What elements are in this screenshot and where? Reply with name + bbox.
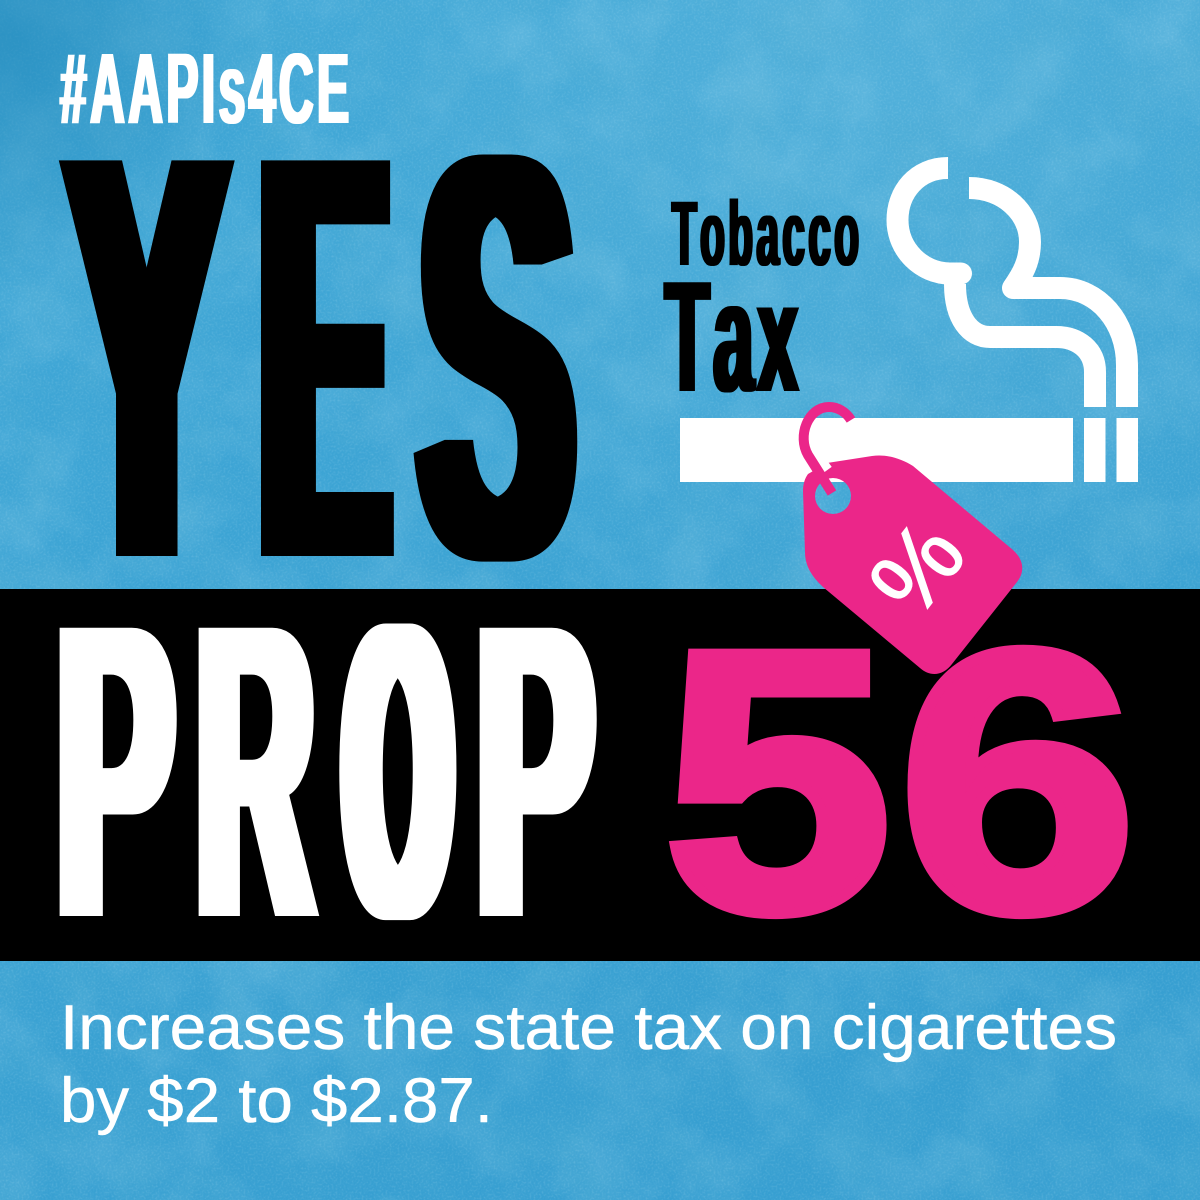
number 56: 6 [898,574,1137,990]
icon: price tag [803,407,1022,674]
percent symbol: % [849,502,986,635]
number 56: 5 [663,574,892,990]
PROP headline: P [477,538,594,1006]
description text [60,993,1117,1136]
PROP headline: P [57,538,174,1006]
tag body [803,455,1022,674]
Tobacco label: Tobacco [672,183,859,286]
PROP headline: O [346,536,450,1005]
number 56 [663,574,1137,990]
tag string [811,450,826,471]
YES headline: S [421,35,572,678]
description text: by $2 to $2.87. [60,1066,493,1136]
PROP headline: R [197,539,314,1006]
black band [0,589,1200,961]
icon: cigarette with smoke [680,168,1138,482]
Tax label: Tax [665,250,798,426]
PROP headline [57,536,594,1006]
YES headline: Y [69,36,225,678]
hashtag heading: #AAPIs4CE [60,32,349,145]
YES headline [69,35,572,678]
description text: Increases the state tax on cigarettes [60,993,1117,1063]
YES headline: E [262,35,387,678]
